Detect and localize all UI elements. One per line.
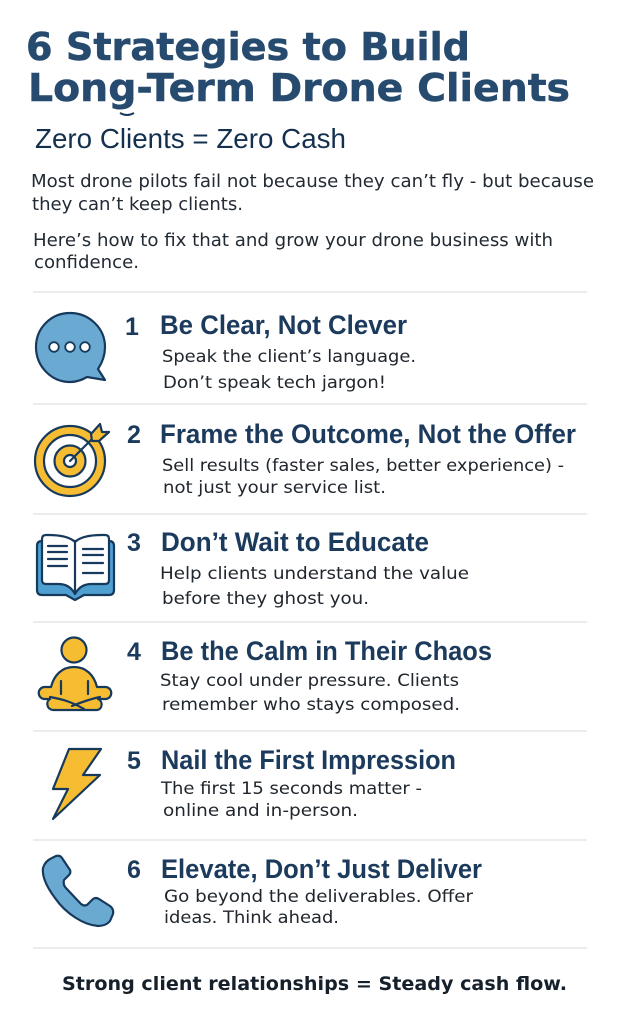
heading 3: Don’t Wait to Educate: [161, 527, 429, 557]
description 6: ideas. Think ahead.: [164, 908, 339, 928]
description 5: The first 15 seconds matter -: [160, 779, 422, 799]
description 1: Don’t speak tech jargon!: [163, 373, 386, 393]
description 3: [160, 564, 469, 609]
description 5: online and in-person.: [163, 801, 358, 821]
description 4: [160, 671, 460, 715]
panel: strategy 2: [35, 419, 576, 498]
intro text: [31, 171, 594, 273]
icon: target with arrow: [35, 424, 109, 496]
intro text: confidence.: [34, 252, 139, 273]
intro text: Here’s how to fix that and grow your drone business with: [33, 230, 553, 251]
description 2: not just your service list.: [163, 478, 386, 498]
panel: strategy 5: [53, 745, 456, 821]
description 2: Sell results (faster sales, better experience) -: [162, 456, 564, 476]
number 3: 3: [127, 529, 141, 557]
intro text: they can’t keep clients.: [32, 194, 243, 215]
icon: speech bubble: [36, 313, 105, 382]
title: [26, 25, 570, 115]
description 5: [160, 779, 422, 821]
description 6: Go beyond the deliverables. Offer: [164, 887, 473, 907]
title: Long-Term Drone Clients: [28, 66, 570, 110]
description 4: Stay cool under pressure. Clients: [160, 671, 459, 691]
description 3: Help clients understand the value: [160, 564, 469, 584]
panel: strategy 4: [39, 636, 492, 715]
icon: phone handset: [43, 856, 113, 926]
number 4: 4: [127, 638, 141, 666]
footer: Strong client relationships = Steady cash flow.: [62, 973, 567, 995]
heading 6: Elevate, Don’t Just Deliver: [161, 854, 482, 884]
description 1: Speak the client’s language.: [162, 347, 416, 367]
description 4: remember who stays composed.: [162, 695, 460, 715]
number 1: 1: [125, 313, 139, 341]
number 2: 2: [127, 421, 141, 449]
panel: strategy 3: [37, 527, 469, 609]
icon: open book: [37, 535, 114, 600]
description 2: [162, 456, 564, 498]
heading 5: Nail the First Impression: [161, 745, 456, 775]
panel: strategy 6: [43, 854, 482, 928]
panel: strategy 1: [36, 310, 416, 393]
description 1: [162, 347, 416, 393]
intro text: Most drone pilots fail not because they can’t fly - but because: [31, 171, 594, 192]
number 5: 5: [127, 747, 141, 775]
description 3: before they ghost you.: [162, 589, 369, 609]
heading 4: Be the Calm in Their Chaos: [161, 636, 492, 666]
icon: meditating person: [39, 638, 111, 710]
icon: lightning bolt: [53, 749, 101, 819]
heading 2: Frame the Outcome, Not the Offer: [160, 419, 576, 449]
heading 1: Be Clear, Not Clever: [160, 310, 407, 340]
title: 6 Strategies to Build: [26, 25, 470, 69]
description 6: [164, 887, 473, 928]
number 6: 6: [127, 856, 141, 884]
subtitle: Zero Clients = Zero Cash: [35, 123, 346, 154]
